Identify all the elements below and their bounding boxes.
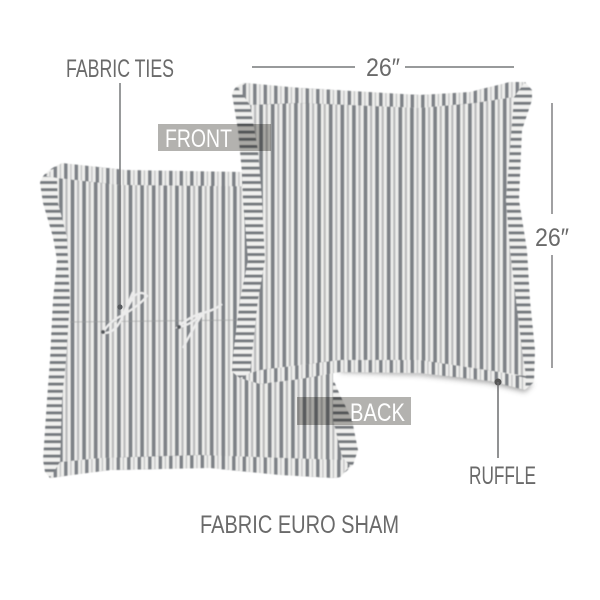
title: FABRIC EURO SHAM xyxy=(200,511,399,539)
back flap seam xyxy=(70,320,240,322)
back ruffle xyxy=(40,163,358,478)
pillow: back view of sham xyxy=(40,163,358,478)
back top band xyxy=(46,163,243,187)
dimension: width 26 inches: 26″ xyxy=(366,54,400,82)
back body xyxy=(57,178,343,462)
callout: ruffle: RUFFLE xyxy=(469,462,536,490)
back bottom band xyxy=(50,455,350,478)
panel: FRONT label: FRONT xyxy=(165,125,232,153)
callout: fabric ties: FABRIC TIES xyxy=(66,55,174,83)
panel: BACK label xyxy=(297,397,411,427)
front body xyxy=(250,97,526,376)
fabric ties bows xyxy=(103,292,222,348)
callout: fabric ties xyxy=(66,55,174,310)
front bottom band xyxy=(240,360,526,390)
pillow: front view of sham xyxy=(232,82,535,390)
front top band xyxy=(238,82,525,108)
callout: ruffle xyxy=(469,378,536,490)
tie knots xyxy=(101,325,181,334)
shadow under front sham xyxy=(340,366,533,392)
panel: BACK label: BACK xyxy=(350,399,405,427)
dimension: height 26 inches: 26″ xyxy=(535,224,569,252)
front ruffle xyxy=(232,82,535,390)
